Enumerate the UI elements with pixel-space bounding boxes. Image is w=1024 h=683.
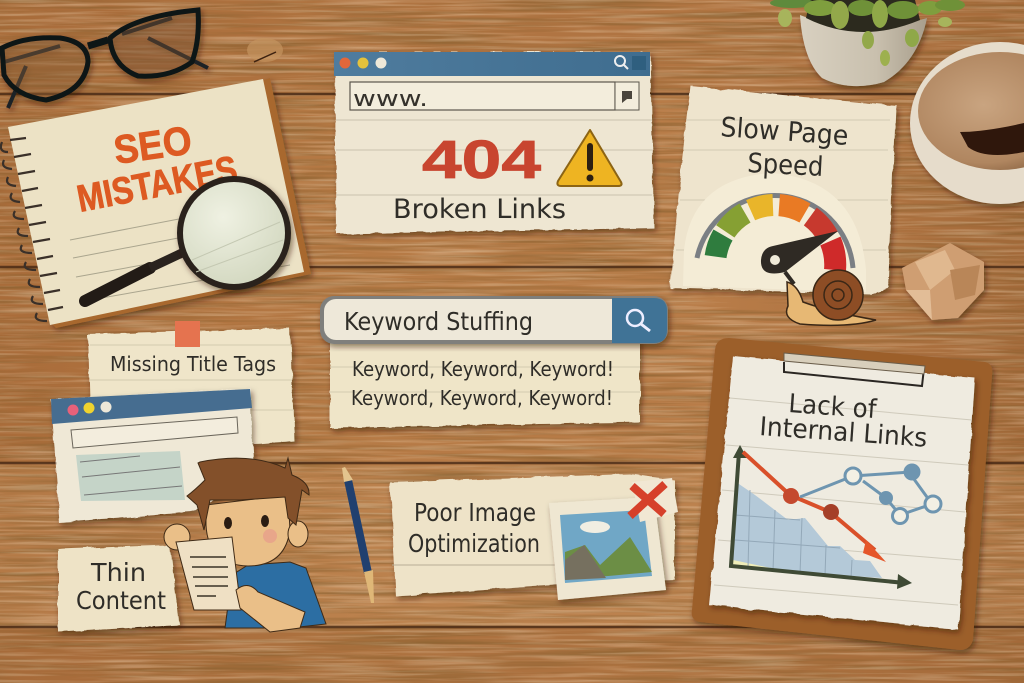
panel: thin content — [58, 545, 180, 632]
slow page speed title: Slow Page — [720, 112, 849, 152]
clipboard title: Internal Links — [759, 412, 928, 454]
gauge needle — [761, 231, 838, 274]
magnifying glass — [85, 179, 288, 301]
thin content text — [76, 558, 166, 615]
keyword text: Keyword, Keyword, Keyword! — [352, 357, 614, 381]
notebook: SEO mistakes — [1, 78, 311, 328]
thin content text: Content — [76, 586, 166, 615]
panel: missing title tags — [88, 321, 295, 444]
red x icon — [630, 478, 678, 522]
pin note — [175, 321, 200, 347]
icon: snail — [786, 270, 876, 325]
clip — [784, 353, 925, 386]
address bar: www. — [353, 87, 428, 112]
address bar — [350, 82, 639, 112]
notebook title: MISTAKES — [74, 149, 241, 221]
panel: broken links — [334, 52, 654, 234]
slow page speed title: Speed — [747, 148, 824, 183]
search bar — [320, 296, 668, 344]
icon: warning triangle — [557, 130, 622, 186]
coffee cup — [910, 42, 1024, 204]
search text: Keyword Stuffing — [344, 307, 533, 336]
clipboard title — [759, 389, 928, 454]
keyword text: Keyword, Keyword, Keyword! — [351, 386, 613, 410]
panel: poor image optimization — [390, 474, 678, 600]
line chart — [731, 445, 941, 589]
clipboard title: Lack of — [788, 389, 878, 425]
speed gauge — [683, 173, 866, 292]
keyword text — [351, 357, 614, 410]
image text — [408, 498, 540, 558]
notebook title: SEO — [111, 118, 194, 173]
plant pot — [770, 0, 965, 86]
404 text: 404 — [422, 130, 541, 190]
thin content text: Thin — [90, 558, 146, 587]
image text: Optimization — [408, 529, 540, 558]
slow page speed title — [720, 112, 849, 183]
title tags text: Missing Title Tags — [110, 352, 276, 376]
panel: clipboard lack of internal links — [692, 338, 992, 650]
image text: Poor Image — [414, 498, 536, 527]
glasses — [2, 10, 208, 108]
notebook title — [74, 118, 241, 221]
panel: slow page speed — [670, 86, 896, 325]
browser window blank — [51, 389, 255, 523]
panel: keyword stuffing — [320, 296, 668, 428]
notebook spiral — [1, 138, 63, 321]
pencil — [342, 467, 374, 603]
broken links label: Broken Links — [393, 194, 566, 225]
crumpled paper — [902, 243, 984, 320]
photo icon — [549, 497, 666, 600]
character: boy with paper — [164, 458, 326, 632]
